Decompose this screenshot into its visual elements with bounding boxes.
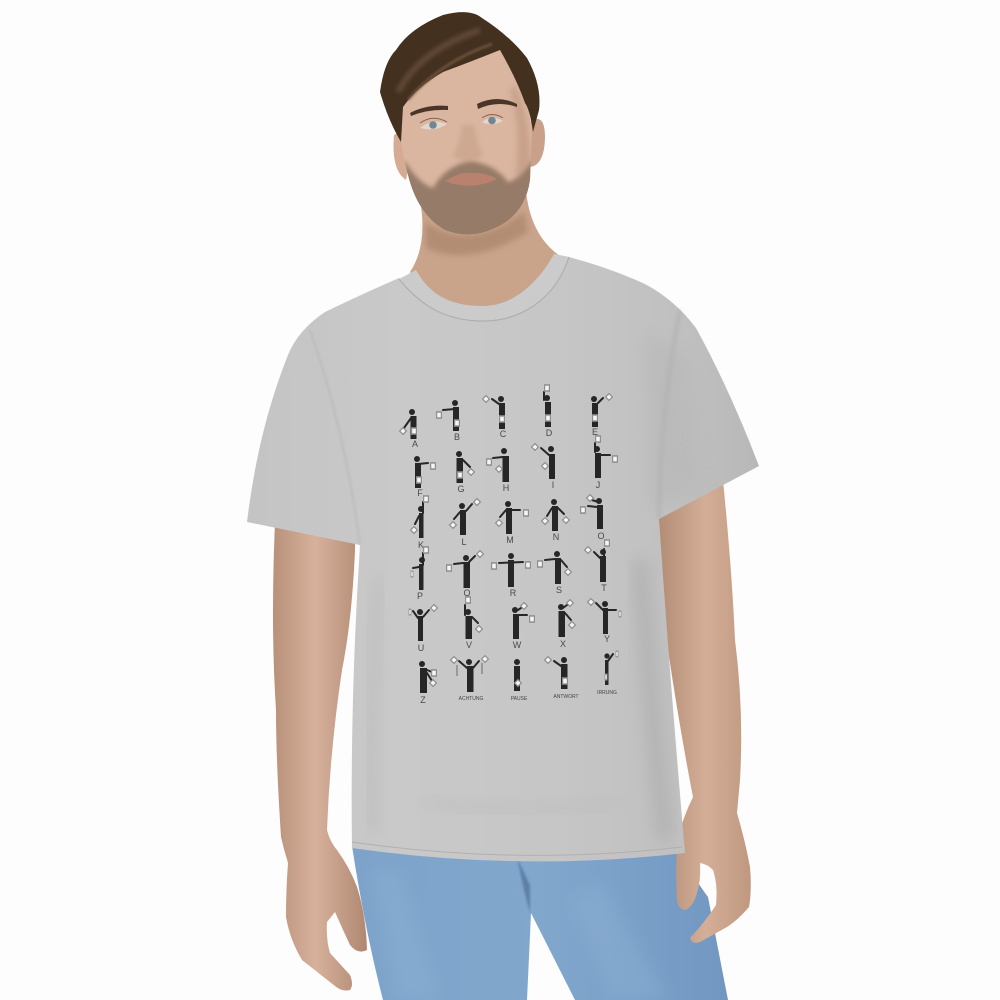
figure M: M <box>506 535 514 545</box>
figure N: N <box>553 532 559 542</box>
figure W <box>512 602 535 650</box>
figure B: B <box>454 432 460 442</box>
figure C: C <box>500 429 507 439</box>
figure U <box>408 604 438 653</box>
left ear <box>394 130 412 180</box>
figure C <box>482 395 507 439</box>
right arm <box>650 470 751 943</box>
figure A <box>399 409 418 449</box>
figure D <box>544 384 553 438</box>
figure ACHTUNG: ACHTUNG <box>459 696 483 702</box>
face shading <box>510 85 530 180</box>
figure T: T <box>601 583 607 593</box>
jeans <box>352 846 728 1000</box>
figure PAUSE: PAUSE <box>511 696 528 702</box>
figure O: O <box>597 531 605 541</box>
collar <box>399 254 569 321</box>
figure A: A <box>412 439 418 449</box>
figure ACHTUNG <box>450 655 489 702</box>
figure P: P <box>417 591 423 601</box>
figure J <box>594 435 618 490</box>
right ear <box>530 119 545 167</box>
figure H <box>486 448 509 493</box>
figure X <box>558 599 576 649</box>
figure G: G <box>457 484 465 494</box>
beard <box>404 158 531 234</box>
figure IRRUNG <box>597 650 618 696</box>
mouth <box>445 173 497 186</box>
figure D: D <box>546 428 553 438</box>
semaphore chart <box>399 384 622 705</box>
figure O <box>580 494 605 541</box>
figure Z: Z <box>420 695 426 705</box>
figure J: J <box>596 480 600 490</box>
figure L: L <box>461 537 467 547</box>
figure Z <box>419 661 437 705</box>
figure S <box>537 551 572 595</box>
figure PAUSE <box>511 659 528 702</box>
figure E: E <box>592 427 598 437</box>
hair <box>380 12 540 142</box>
figure F <box>414 456 436 498</box>
figure W: W <box>513 640 522 650</box>
figure V <box>465 596 483 650</box>
figure X: X <box>560 639 566 649</box>
figure ANTWORT <box>544 656 579 700</box>
figure T <box>584 539 610 593</box>
face <box>400 48 532 235</box>
figure K <box>410 495 429 550</box>
figure Q: Q <box>463 588 471 598</box>
figure Y: Y <box>604 634 610 644</box>
figure R: R <box>510 588 517 598</box>
figure K: K <box>418 540 424 550</box>
figure M <box>495 501 529 545</box>
figure I <box>531 443 555 490</box>
figure B <box>436 400 460 442</box>
t-shirt <box>247 254 759 861</box>
nose <box>453 125 483 161</box>
figure Y <box>587 598 622 644</box>
figure IRRUNG: IRRUNG <box>597 690 617 696</box>
left arm <box>273 500 367 990</box>
figure U: U <box>418 643 424 653</box>
figure R <box>491 553 531 598</box>
figure S: S <box>556 585 562 595</box>
figure L <box>449 498 481 547</box>
neck <box>410 190 560 318</box>
figure I: I <box>552 480 554 490</box>
figure N <box>541 499 570 542</box>
figure H: H <box>503 483 509 493</box>
figure G <box>456 451 475 494</box>
figure Q <box>446 550 484 598</box>
sleeve seams and folds <box>310 330 360 545</box>
figure E <box>591 393 613 437</box>
figure V: V <box>466 640 472 650</box>
figure P <box>410 546 429 601</box>
figure ANTWORT: ANTWORT <box>553 694 579 700</box>
figure F: F <box>417 488 423 498</box>
eyes and brows <box>410 99 517 129</box>
